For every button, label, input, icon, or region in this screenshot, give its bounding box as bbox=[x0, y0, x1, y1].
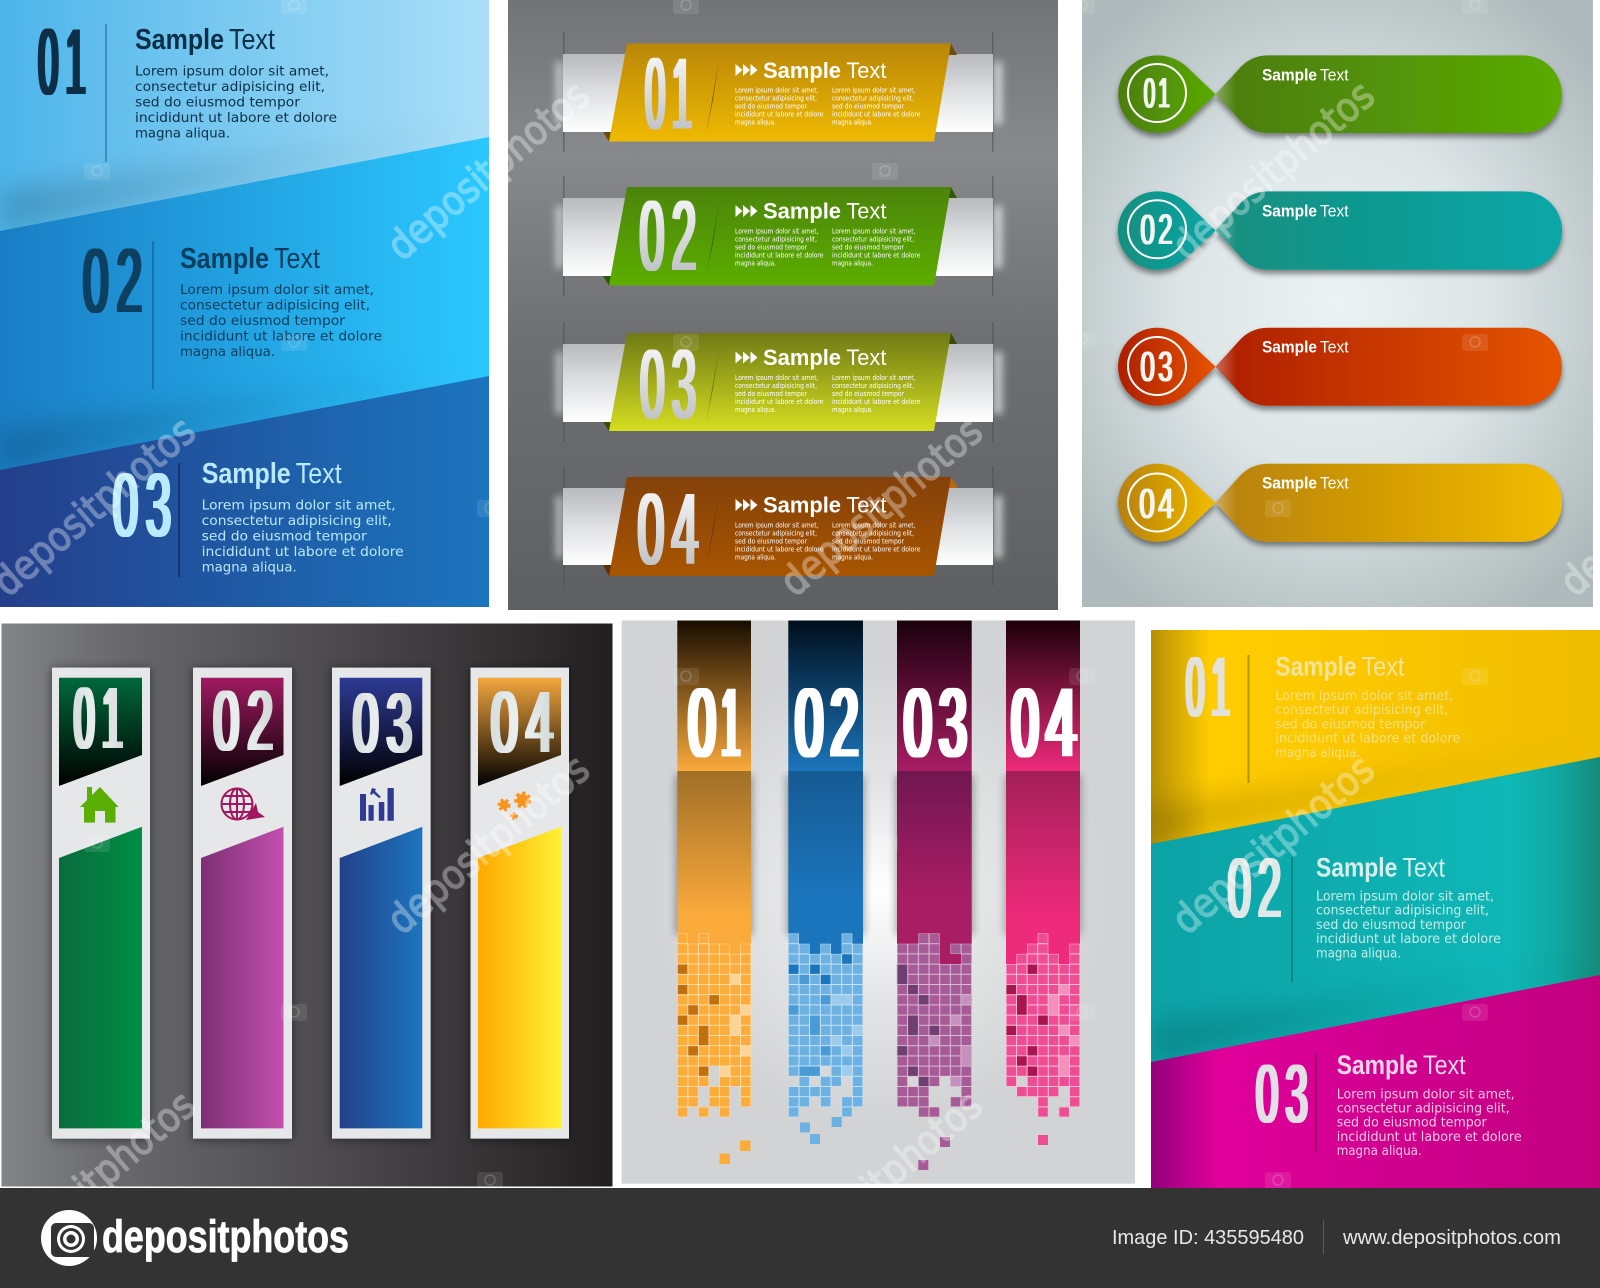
text block 02 bbox=[1316, 852, 1501, 962]
ribbon 01: Lorem ipsum dolor sit amet, bbox=[735, 86, 818, 94]
ribbon 02: sed do eiusmod tempor bbox=[735, 244, 807, 252]
text block 03: Sample bbox=[1337, 1050, 1418, 1080]
stripe 03: 3 bbox=[939, 668, 967, 778]
ribbon 01: consectetur adipisicing elit, bbox=[832, 94, 914, 102]
card 01: 1 bbox=[102, 670, 122, 767]
ribbon 02: Sample bbox=[763, 198, 841, 224]
ribbon 04: 4 bbox=[672, 474, 698, 586]
ribbon 04: 0 bbox=[638, 474, 664, 586]
ribbon 02: 0 bbox=[640, 180, 664, 291]
pixel mosaic 03 bbox=[897, 934, 972, 1117]
pill 02: 0 bbox=[1140, 206, 1155, 254]
icon: gears bbox=[500, 794, 529, 818]
stripe 02: 2 bbox=[830, 668, 858, 778]
panel: blue diagonal layout bbox=[0, 0, 489, 607]
text block 03: Sample bbox=[202, 458, 291, 490]
ribbon 02 bbox=[556, 176, 1002, 296]
pixel mosaic 04 bbox=[1006, 934, 1080, 1117]
card 04: 0 bbox=[491, 674, 518, 771]
text block 02: Lorem ipsum dolor sit amet, bbox=[180, 283, 374, 298]
icon: logo camera bbox=[41, 1210, 97, 1266]
ribbon 02: Lorem ipsum dolor sit amet, bbox=[735, 228, 818, 236]
card 03 bbox=[332, 668, 431, 1139]
ribbon 01: incididunt ut labore et dolore bbox=[735, 110, 824, 118]
ribbon 01: magna aliqua. bbox=[735, 118, 776, 126]
text block 02: Text bbox=[274, 243, 320, 275]
text block 01: Lorem ipsum dolor sit amet, bbox=[135, 64, 329, 80]
card 02: 2 bbox=[248, 674, 273, 769]
icon: house bbox=[80, 787, 119, 823]
panel: teardrop pills bbox=[1082, 0, 1593, 607]
pill 01: 0 bbox=[1144, 70, 1155, 118]
ribbon 04: Lorem ipsum dolor sit amet, bbox=[832, 522, 916, 530]
text block 02: incididunt ut labore et dolore bbox=[180, 330, 382, 344]
text block 02: consectetur adipisicing elit, bbox=[1316, 904, 1489, 918]
text block 01 bbox=[135, 24, 337, 142]
text block 01: Sample bbox=[135, 24, 224, 56]
ribbon 03: sed do eiusmod tempor bbox=[832, 390, 904, 398]
ribbon 03: Lorem ipsum dolor sit amet, bbox=[735, 374, 818, 382]
ribbon 01: consectetur adipisicing elit, bbox=[735, 94, 817, 102]
card 01 bbox=[52, 668, 150, 1139]
watermark: depositphotos diagonals: depositphotos bbox=[379, 746, 599, 944]
pill 02 bbox=[1118, 191, 1562, 270]
ribbon 02: incididunt ut labore et dolore bbox=[832, 252, 920, 260]
ribbon 03: magna aliqua. bbox=[735, 406, 776, 414]
text block 02: consectetur adipisicing elit, bbox=[180, 298, 370, 314]
text block 01: Sample bbox=[1275, 652, 1357, 682]
stripe 02 bbox=[788, 620, 863, 1144]
ribbon 01 bbox=[556, 32, 1002, 152]
ribbon 02: consectetur adipisicing elit, bbox=[735, 236, 817, 244]
pill 04: Sample bbox=[1262, 474, 1317, 493]
number 02: 0 bbox=[1228, 841, 1251, 935]
stripe 04: 4 bbox=[1046, 668, 1076, 778]
text block 01: incididunt ut labore et dolore bbox=[1275, 732, 1460, 746]
text block 03: consectetur adipisicing elit, bbox=[202, 514, 392, 529]
footer bar bbox=[0, 1188, 1600, 1288]
text block 03: sed do eiusmod tempor bbox=[202, 530, 367, 544]
image id: Image ID: 435595480 bbox=[1112, 1227, 1304, 1249]
text block 03: incididunt ut labore et dolore bbox=[202, 545, 404, 560]
number 03: 0 bbox=[113, 456, 138, 556]
text block 02: magna aliqua. bbox=[180, 345, 275, 360]
pill 02: 2 bbox=[1158, 206, 1172, 254]
ribbon 04: magna aliqua. bbox=[832, 554, 873, 562]
ribbon 03: incididunt ut labore et dolore bbox=[832, 398, 920, 406]
pill 02: Sample bbox=[1262, 201, 1317, 220]
text block 01: sed do eiusmod tempor bbox=[1275, 718, 1426, 732]
text block 01: consectetur adipisicing elit, bbox=[135, 80, 325, 95]
watermark: depositphotos diagonals: depositphotos bbox=[379, 72, 599, 270]
card 02: 0 bbox=[214, 674, 239, 769]
card 03: 3 bbox=[387, 676, 412, 770]
ribbon 04: consectetur adipisicing elit, bbox=[832, 530, 914, 538]
ribbon 03: incididunt ut labore et dolore bbox=[735, 398, 824, 406]
pill 04: 4 bbox=[1158, 480, 1174, 528]
text block 01: magna aliqua. bbox=[135, 126, 230, 142]
ribbon 01: 0 bbox=[645, 38, 665, 150]
ribbon 04: incididunt ut labore et dolore bbox=[735, 546, 824, 554]
icon: bar chart bbox=[360, 788, 394, 821]
ribbon 03: consectetur adipisicing elit, bbox=[832, 382, 914, 390]
text block 02: Lorem ipsum dolor sit amet, bbox=[1316, 890, 1494, 904]
text block 02: Text bbox=[1402, 852, 1445, 882]
text block 02: sed do eiusmod tempor bbox=[1316, 918, 1466, 933]
text block 03 bbox=[202, 458, 404, 576]
pill 01: 1 bbox=[1158, 70, 1170, 118]
icon: globe with arrow bbox=[222, 788, 265, 820]
watermark: depositphotos diagonals: depositphotos bbox=[772, 408, 992, 606]
ribbon 03: Text bbox=[846, 345, 886, 370]
text block 03: Lorem ipsum dolor sit amet, bbox=[1337, 1088, 1515, 1102]
ribbon 01: 1 bbox=[672, 38, 692, 150]
card 02 bbox=[193, 668, 292, 1139]
text block 03 bbox=[1337, 1050, 1522, 1159]
stripe 01: 1 bbox=[722, 668, 739, 778]
ribbon 01: sed do eiusmod tempor bbox=[735, 102, 807, 110]
ribbon 03 bbox=[556, 322, 1002, 442]
ribbon 01: sed do eiusmod tempor bbox=[832, 102, 904, 110]
ribbon 02: 2 bbox=[672, 180, 696, 291]
ribbon 03: 0 bbox=[640, 329, 664, 439]
ribbon 04: sed do eiusmod tempor bbox=[832, 538, 904, 546]
stripe 04: 0 bbox=[1012, 668, 1038, 778]
text block 03: Text bbox=[1423, 1050, 1466, 1080]
ribbon 02: sed do eiusmod tempor bbox=[832, 244, 904, 252]
text block 01: magna aliqua. bbox=[1275, 746, 1360, 761]
panel: bright diagonal layout: 1 bbox=[1211, 640, 1230, 734]
text block 03: Lorem ipsum dolor sit amet, bbox=[202, 498, 396, 514]
panel: bright diagonal layout: 3 bbox=[1286, 1047, 1308, 1140]
text block 02: incididunt ut labore et dolore bbox=[1316, 932, 1501, 947]
pill 04 bbox=[1118, 464, 1562, 542]
pill 02: Text bbox=[1320, 201, 1349, 220]
card 04: 4 bbox=[526, 674, 553, 771]
pill 04: 0 bbox=[1139, 480, 1155, 528]
ribbon 04: Lorem ipsum dolor sit amet, bbox=[735, 522, 818, 530]
watermark: depositphotos diagonals: depositphotos bbox=[772, 1082, 992, 1280]
text block 03: sed do eiusmod tempor bbox=[1337, 1116, 1487, 1130]
pill 03: 3 bbox=[1158, 343, 1172, 391]
ribbon 04: consectetur adipisicing elit, bbox=[735, 530, 817, 538]
text block 03: consectetur adipisicing elit, bbox=[1337, 1102, 1510, 1116]
number 03: 3 bbox=[146, 456, 171, 556]
text block 01: sed do eiusmod tempor bbox=[135, 96, 301, 110]
ribbon 02: consectetur adipisicing elit, bbox=[832, 236, 914, 244]
stripe 03: 0 bbox=[904, 668, 931, 778]
stripe 01: 0 bbox=[689, 668, 715, 778]
panel: blue diagonal layout: 1 bbox=[66, 9, 86, 114]
pill 04: Text bbox=[1320, 474, 1349, 493]
text block 01: incididunt ut labore et dolore bbox=[135, 111, 337, 126]
card 03: 0 bbox=[353, 676, 378, 770]
panel: bright diagonal layout: 2 bbox=[1258, 841, 1281, 935]
ribbon 02: Lorem ipsum dolor sit amet, bbox=[832, 228, 916, 236]
ribbon 03: consectetur adipisicing elit, bbox=[735, 382, 817, 390]
number 01: 0 bbox=[38, 9, 58, 114]
ribbon 04: Text bbox=[846, 492, 886, 518]
panel: dark vertical cards bbox=[2, 624, 612, 1186]
panel: bright diagonal layout bbox=[1151, 630, 1600, 1188]
card 04 bbox=[470, 668, 569, 1139]
text block 03: magna aliqua. bbox=[1337, 1144, 1422, 1159]
ribbon 04: Sample bbox=[763, 492, 841, 518]
text block 01 bbox=[1275, 652, 1460, 761]
stripe 02: 0 bbox=[796, 668, 823, 778]
ribbon 03: Sample bbox=[763, 345, 841, 370]
ribbon 02: magna aliqua. bbox=[735, 260, 776, 268]
stripe 04 bbox=[1006, 620, 1080, 1145]
ribbon 01: Lorem ipsum dolor sit amet, bbox=[832, 86, 916, 94]
watermark: depositphotos diagonals: depositphotos bbox=[1164, 746, 1384, 944]
panel: pixel stripes bbox=[622, 620, 1135, 1184]
text block 02: Sample bbox=[180, 243, 269, 275]
pill 01 bbox=[1118, 55, 1562, 133]
ribbon 03: magna aliqua. bbox=[832, 406, 873, 414]
ribbon 04: sed do eiusmod tempor bbox=[735, 538, 807, 546]
ribbon 04: magna aliqua. bbox=[735, 554, 776, 562]
number 02: 2 bbox=[116, 231, 142, 332]
card 01: 0 bbox=[74, 670, 94, 767]
pixel mosaic 01 bbox=[677, 934, 751, 1117]
stripe 01 bbox=[677, 620, 751, 1164]
ribbon 02: magna aliqua. bbox=[832, 260, 873, 268]
logo wordmark: depositphotos bbox=[102, 1211, 349, 1262]
text block 02: magna aliqua. bbox=[1316, 946, 1401, 962]
pill 03: Sample bbox=[1262, 338, 1317, 357]
text block 01: Lorem ipsum dolor sit amet, bbox=[1275, 689, 1453, 704]
pill 03: Text bbox=[1320, 338, 1349, 357]
pill 03: 0 bbox=[1140, 343, 1155, 391]
ribbon 01: Sample bbox=[763, 58, 841, 83]
number 02: 0 bbox=[83, 231, 108, 332]
pill 01: Sample bbox=[1262, 65, 1317, 84]
ribbon 01: Text bbox=[846, 58, 886, 83]
text block 03: Text bbox=[296, 458, 342, 490]
ribbon 04: incididunt ut labore et dolore bbox=[832, 546, 920, 554]
text block 02: sed do eiusmod tempor bbox=[180, 314, 346, 329]
ribbon 03: Lorem ipsum dolor sit amet, bbox=[832, 374, 916, 382]
panel: grey ribbons bbox=[508, 0, 1058, 610]
ribbon 02: incididunt ut labore et dolore bbox=[735, 252, 824, 260]
text block 02 bbox=[180, 243, 382, 360]
ribbon 01: incididunt ut labore et dolore bbox=[832, 110, 920, 118]
text block 01: Text bbox=[1362, 652, 1405, 682]
ribbon 01: magna aliqua. bbox=[832, 118, 873, 126]
ribbon 04 bbox=[556, 466, 1002, 586]
number 03: 0 bbox=[1256, 1047, 1278, 1140]
ribbon 02: Text bbox=[846, 198, 886, 224]
text block 01: consectetur adipisicing elit, bbox=[1275, 703, 1448, 718]
watermark: depositphotos diagonals: depositphotos bbox=[1164, 72, 1384, 270]
ribbon 03: 3 bbox=[672, 329, 696, 439]
text block 03: incididunt ut labore et dolore bbox=[1337, 1130, 1522, 1145]
text block 02: Sample bbox=[1316, 852, 1397, 882]
number 01: 0 bbox=[1186, 640, 1204, 734]
text block 03: magna aliqua. bbox=[202, 560, 297, 576]
pill 03 bbox=[1118, 328, 1562, 406]
ribbon 03: sed do eiusmod tempor bbox=[735, 390, 807, 398]
website: www.depositphotos.com bbox=[1342, 1227, 1561, 1249]
pill 01: Text bbox=[1320, 65, 1349, 84]
text block 01: Text bbox=[229, 24, 275, 56]
stripe 03 bbox=[897, 620, 972, 1170]
pixel mosaic 02 bbox=[788, 934, 863, 1117]
